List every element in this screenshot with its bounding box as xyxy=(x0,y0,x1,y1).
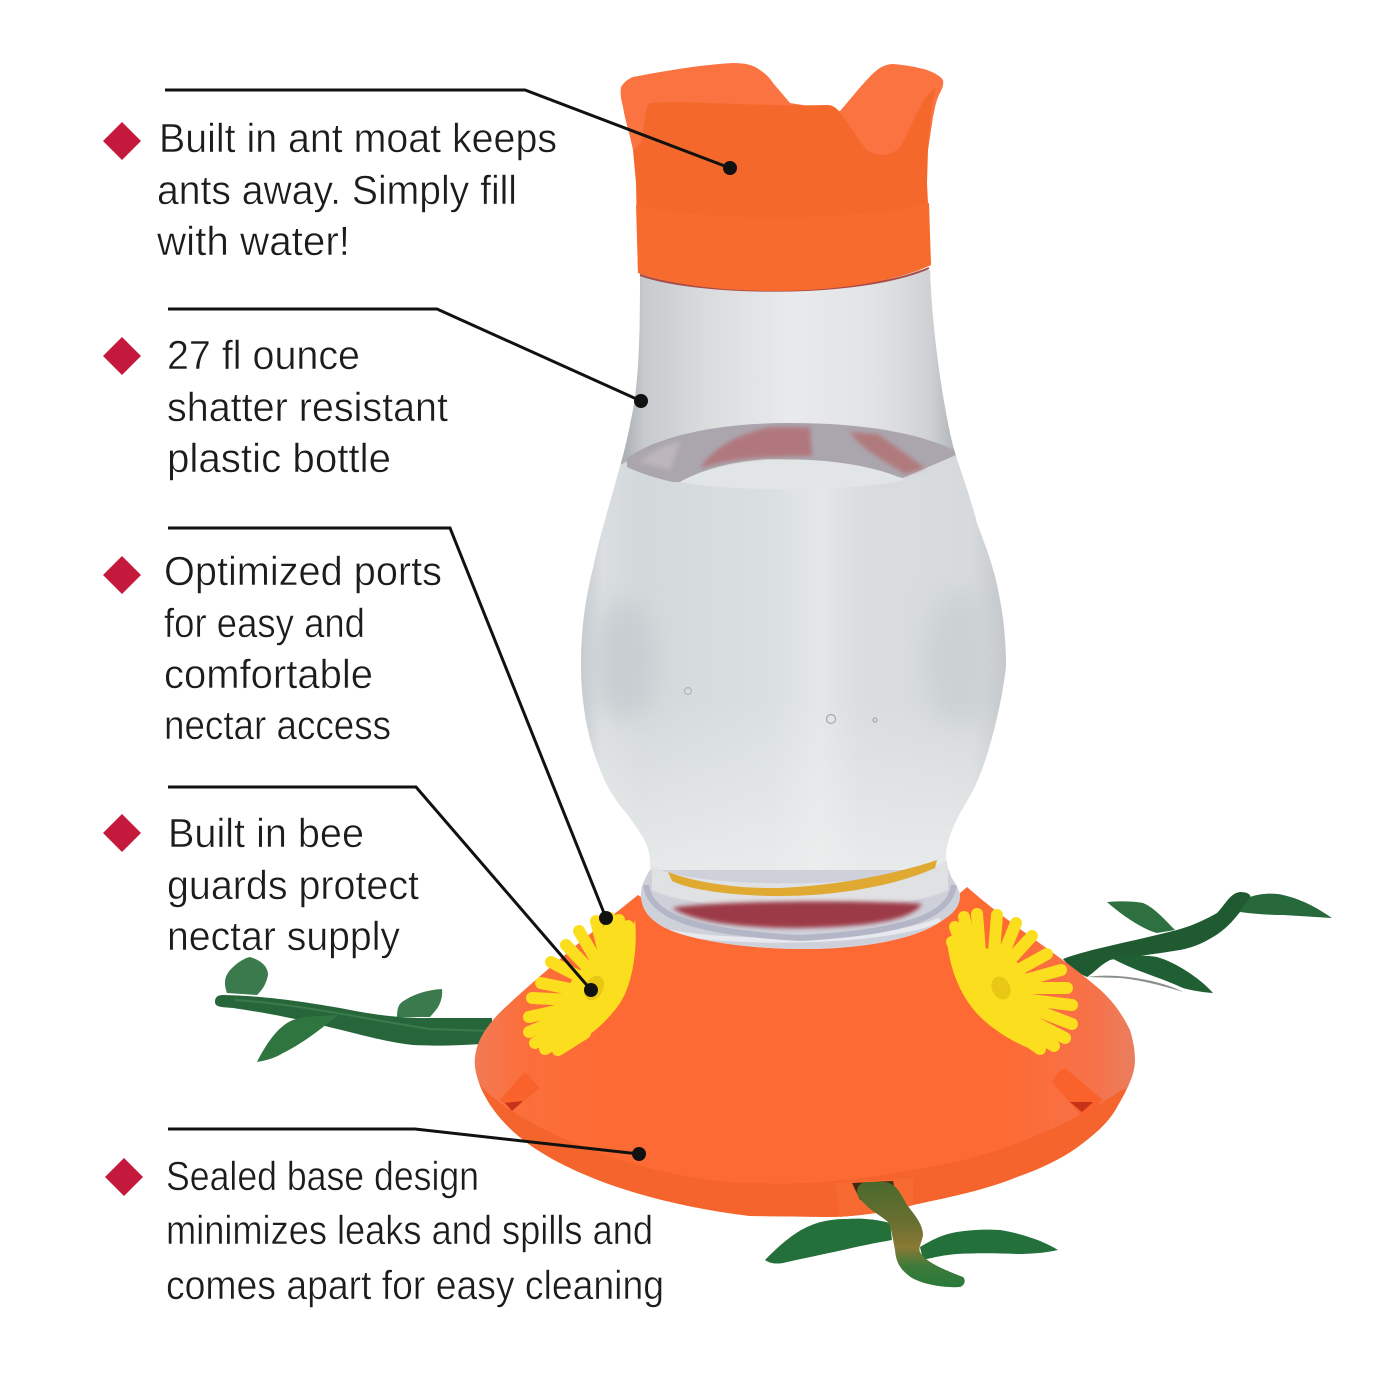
vine: front perch xyxy=(765,1182,1058,1287)
text: ants away. Simply fill xyxy=(157,167,517,213)
cap back rim xyxy=(621,63,943,170)
text: Optimized ports xyxy=(164,548,442,594)
text: nectar access xyxy=(164,702,391,748)
diamond bullet xyxy=(103,337,141,375)
nectar residue xyxy=(672,901,922,928)
diamond bullet xyxy=(103,122,141,160)
bubbles xyxy=(684,688,692,694)
leader line xyxy=(168,528,606,918)
bee guard flower: left xyxy=(529,918,636,1055)
text: shatter resistant xyxy=(167,384,449,430)
petals xyxy=(952,914,1072,1049)
left port vent xyxy=(500,1072,540,1111)
leader line xyxy=(168,309,641,401)
diamond bullet xyxy=(103,556,141,594)
disk xyxy=(947,940,1043,1053)
callout 4: bee guards xyxy=(103,787,598,997)
text: nectar supply xyxy=(167,913,400,959)
text: Built in ant moat keeps xyxy=(159,115,557,161)
callout 3: ports xyxy=(103,528,613,925)
plastic bottle xyxy=(570,260,1020,960)
text: plastic bottle xyxy=(167,435,391,481)
collar xyxy=(640,870,960,949)
text: 27 fl ounce xyxy=(167,332,360,378)
text: minimizes leaks and spills and xyxy=(166,1207,653,1253)
text xyxy=(164,548,442,748)
text: for easy and xyxy=(164,600,365,646)
petals xyxy=(529,918,628,1050)
text: comes apart for easy cleaning xyxy=(166,1262,664,1308)
feeder base xyxy=(470,887,1140,1240)
diamond bullet xyxy=(105,1158,143,1196)
leader line xyxy=(168,787,591,990)
right port vent xyxy=(1052,1068,1103,1117)
lower glow xyxy=(611,764,983,870)
leader line xyxy=(165,90,730,168)
text xyxy=(166,1153,664,1308)
callout 5: sealed base xyxy=(105,1129,664,1308)
leader line xyxy=(168,1129,639,1154)
diamond bullet xyxy=(103,814,141,852)
port hole xyxy=(580,972,608,1004)
text: Built in bee xyxy=(168,810,364,856)
callout 2: bottle xyxy=(103,309,648,481)
refraction shadow xyxy=(598,606,649,714)
port hole xyxy=(988,973,1014,1003)
text: comfortable xyxy=(164,651,373,697)
yellow band xyxy=(668,860,937,896)
vine: left perch xyxy=(215,957,493,1062)
cap front panel xyxy=(633,88,936,291)
lower rim band xyxy=(479,1084,1126,1217)
air space above nectar xyxy=(620,260,960,465)
text: guards protect xyxy=(167,862,420,908)
orange cap with ant moat xyxy=(621,63,943,291)
callout 1: ant moat xyxy=(103,90,737,264)
text: Sealed base design xyxy=(166,1153,479,1199)
text xyxy=(156,115,557,264)
text xyxy=(167,810,420,959)
liquid surface xyxy=(627,423,960,482)
vine: right perch xyxy=(1063,892,1332,993)
bee guard flower: right xyxy=(947,914,1072,1053)
text xyxy=(167,332,449,481)
meniscus lens xyxy=(680,460,905,489)
water body xyxy=(570,260,1020,960)
disk xyxy=(553,920,636,1055)
text: with water! xyxy=(156,218,350,264)
notch for front perch xyxy=(835,1178,913,1217)
